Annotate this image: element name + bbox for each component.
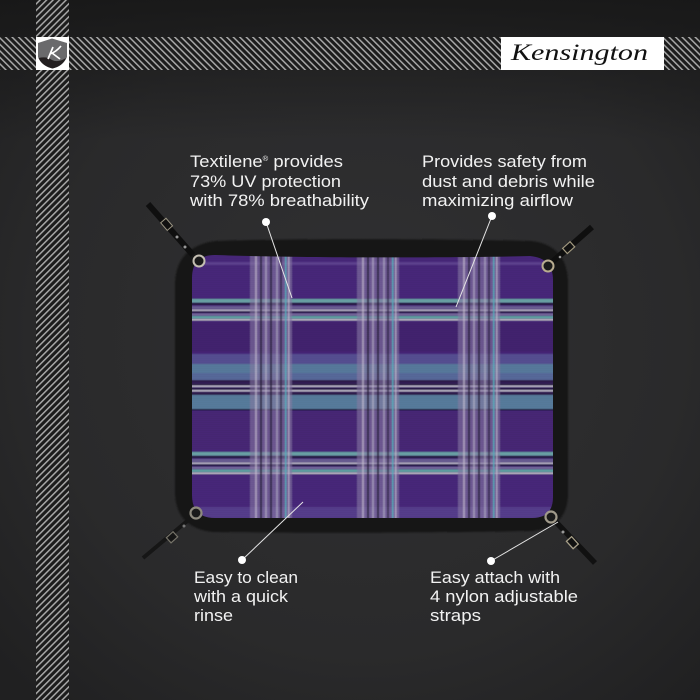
callout: Textilene UV protection: provides — [268, 152, 343, 171]
icon: Kensington K shield logo — [36, 37, 69, 70]
horizontal diagonal-striped band — [0, 37, 700, 70]
strap: top left — [148, 204, 204, 266]
callout: easy attach straps: 4 nylon adjustable — [430, 587, 578, 606]
fly sheet product — [175, 239, 568, 533]
straps and rings — [143, 204, 595, 563]
callout: Textilene UV protection — [189, 152, 370, 298]
strap: top right — [542, 227, 592, 272]
callout: safety from dust and debris — [422, 152, 595, 307]
callout: easy attach straps: straps — [430, 606, 481, 625]
strap: bottom left — [143, 508, 202, 558]
callout: easy attach straps: Easy attach with — [430, 568, 560, 587]
callout: safety from dust and debris: maximizing airflow — [422, 191, 574, 210]
black binding — [175, 239, 568, 533]
callout: Textilene UV protection: ® — [263, 155, 269, 163]
callout: safety from dust and debris: Provides safety from — [422, 152, 587, 171]
plaid panel — [192, 255, 553, 518]
Kensington wordmark logo — [501, 37, 664, 70]
Kensington wordmark logo: Kensington — [510, 40, 648, 65]
callout: easy to clean — [193, 502, 303, 625]
callout: Textilene UV protection: 73% UV protection — [190, 172, 341, 191]
horizontal bands — [190, 299, 556, 474]
callout: easy to clean: Easy to clean — [194, 568, 298, 587]
strap: bottom right — [546, 512, 595, 563]
callout: Textilene UV protection: with 78% breathability — [189, 191, 370, 210]
callout: Textilene UV protection: Textilene — [190, 152, 257, 171]
vertical diagonal-striped band — [36, 0, 69, 700]
callout: easy attach straps — [430, 522, 578, 625]
callout: easy to clean: rinse — [194, 606, 233, 625]
vertical bands — [250, 240, 500, 530]
callout: safety from dust and debris: dust and debris while — [422, 172, 595, 191]
callout: easy to clean: with a quick — [193, 587, 289, 606]
